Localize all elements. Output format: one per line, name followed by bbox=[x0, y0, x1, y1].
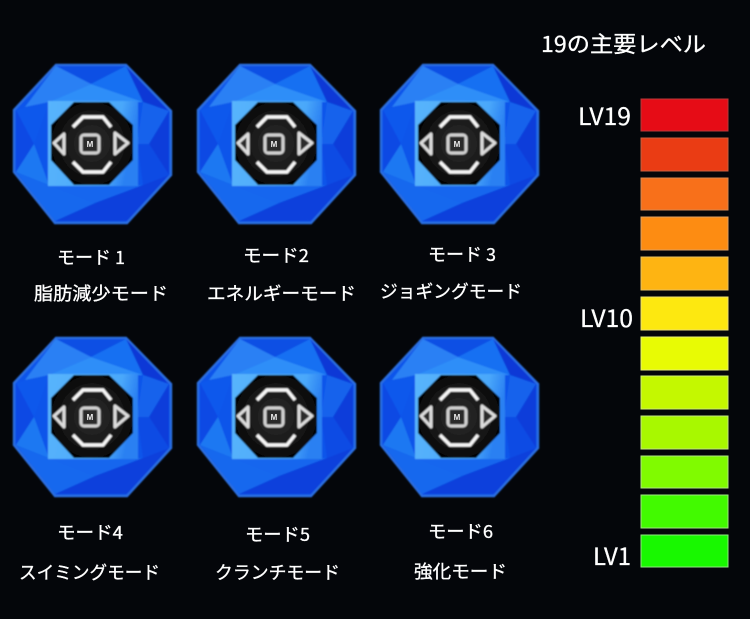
mode 6 gem icon: M bbox=[454, 413, 461, 422]
mode 3 gem icon bbox=[381, 65, 538, 223]
mode 2 label: モード2 bbox=[243, 242, 309, 268]
level label LV19: LV19 bbox=[578, 97, 631, 132]
mode 4 gem icon bbox=[14, 338, 171, 496]
mode 1 gem icon bbox=[14, 65, 171, 223]
level label LV1: LV1 bbox=[593, 537, 631, 572]
mode 5 gem icon bbox=[198, 338, 355, 496]
level color bars bbox=[641, 99, 728, 567]
mode 4 gem icon: M bbox=[87, 413, 94, 422]
mode 4 label: モード4 bbox=[57, 519, 123, 545]
mode 1 label: モード 1 bbox=[57, 244, 125, 270]
level scale title: 19の主要レベル bbox=[541, 27, 706, 59]
mode 2 gem icon bbox=[198, 65, 355, 223]
mode 2 name: エネルギーモード bbox=[207, 280, 356, 306]
mode 6 gem icon bbox=[381, 338, 538, 496]
mode 5 label: モード5 bbox=[245, 521, 310, 547]
mode 6 name: 強化モード bbox=[414, 558, 507, 584]
mode 5 gem icon: M bbox=[271, 413, 278, 422]
mode 3 gem icon: M bbox=[454, 140, 461, 149]
mode 1 name: 脂肪減少モード bbox=[34, 280, 168, 306]
level label LV10: LV10 bbox=[580, 299, 633, 334]
mode 6 label: モード6 bbox=[428, 518, 493, 544]
mode 4 name: スイミングモード bbox=[19, 559, 160, 585]
mode 5 name: クランチモード bbox=[215, 559, 340, 585]
mode 2 gem icon: M bbox=[271, 140, 278, 149]
mode 3 name: ジョギングモード bbox=[380, 278, 522, 304]
mode 1 gem icon: M bbox=[87, 140, 94, 149]
mode 3 label: モード 3 bbox=[428, 241, 496, 267]
